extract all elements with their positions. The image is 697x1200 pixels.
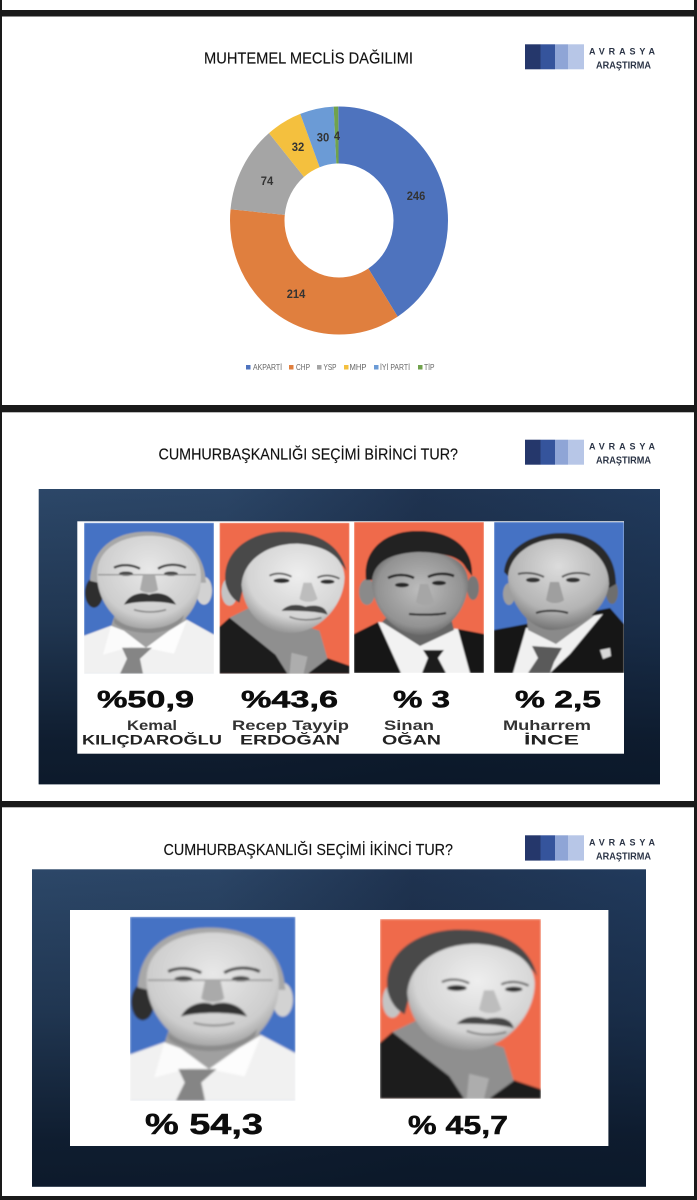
navy results board xyxy=(39,489,660,784)
panel: muhtemel meclis dağılımı xyxy=(2,16,694,405)
logo: avrasya araştırma xyxy=(525,44,656,71)
candidate result: İnce: Muharrem xyxy=(503,717,591,733)
heading: birinci tur: CUMHURBAŞKANLIĞI SEÇİMİ BİRİNCİ TUR? xyxy=(158,444,458,463)
logo: avrasya araştırma xyxy=(525,440,656,467)
donut chart: 32 xyxy=(292,140,305,154)
logo: avrasya araştırma: AVRASYA xyxy=(589,837,656,847)
candidate result: Kılıçdaroğlu: KILIÇDAROĞLU xyxy=(82,732,222,747)
candidate result: Oğan: OĞAN xyxy=(382,732,441,747)
logo: avrasya araştırma: ARAŞTIRMA xyxy=(596,60,651,71)
panel: birinci tur xyxy=(2,412,694,801)
result: Erdoğan 45,7: % 45,7 xyxy=(408,1110,508,1140)
heading: muhtemel meclis dağılımı: MUHTEMEL MECLİS DAĞILIMI xyxy=(204,48,413,68)
portrait: Recep Tayyip Erdoğan xyxy=(220,523,350,674)
candidate result: Oğan: Sinan xyxy=(384,717,434,733)
logo: avrasya araştırma: ARAŞTIRMA xyxy=(596,456,651,467)
chart legend xyxy=(246,363,434,372)
logo: avrasya araştırma: ARAŞTIRMA xyxy=(596,851,651,862)
portrait: Sinan Oğan xyxy=(354,522,484,673)
candidate result: İnce: % 2,5 xyxy=(515,687,601,714)
candidate result: Kılıçdaroğlu: %50,9 xyxy=(97,687,194,714)
candidate result: Oğan: % 3 xyxy=(393,687,450,714)
previous slide remnant xyxy=(2,0,694,10)
logo: avrasya araştırma: AVRASYA xyxy=(589,46,656,56)
logo: avrasya araştırma: AVRASYA xyxy=(589,442,656,452)
donut chart: 214 xyxy=(287,287,306,301)
portrait: Muharrem İnce xyxy=(494,522,624,673)
candidate result: Oğan xyxy=(382,687,450,747)
white results card xyxy=(70,910,608,1146)
panel: ikinci tur xyxy=(2,807,694,1196)
portrait: Recep Tayyip Erdoğan xyxy=(380,919,541,1099)
result: Kılıçdaroğlu 54,3: % 54,3 xyxy=(145,1109,263,1141)
candidate result: Erdoğan xyxy=(232,687,349,747)
candidate result: Kılıçdaroğlu: Kemal xyxy=(127,717,177,733)
chart legend: CHP xyxy=(296,363,310,372)
logo: avrasya araştırma xyxy=(525,835,656,862)
navy results board xyxy=(32,869,646,1187)
donut chart xyxy=(257,129,426,306)
candidate result: İnce: İNCE xyxy=(524,732,579,747)
candidate result: Erdoğan: %43,6 xyxy=(241,687,338,714)
donut chart: 30 xyxy=(317,130,330,144)
chart legend: İYİ PARTİ xyxy=(380,363,410,372)
portrait: Kemal Kılıçdaroğlu xyxy=(84,523,214,674)
candidate result: Kılıçdaroğlu xyxy=(82,687,222,747)
chart legend: YSP xyxy=(324,363,336,372)
chart legend: AKPARTİ xyxy=(253,363,282,372)
candidate result: Erdoğan: Recep Tayyip xyxy=(232,717,349,733)
heading: ikinci tur: CUMHURBAŞKANLIĞI SEÇİMİ İKİNCİ TUR? xyxy=(164,840,453,859)
chart legend: MHP xyxy=(350,363,366,372)
candidate result: İnce xyxy=(503,687,601,747)
chart legend: TİP xyxy=(424,363,434,372)
donut chart: 4 xyxy=(334,129,340,143)
white results card xyxy=(77,521,624,754)
portrait: Kemal Kılıçdaroğlu xyxy=(130,917,295,1101)
donut chart: 74 xyxy=(261,174,274,188)
donut chart: 246 xyxy=(407,189,426,203)
candidate result: Erdoğan: ERDOĞAN xyxy=(240,732,340,747)
